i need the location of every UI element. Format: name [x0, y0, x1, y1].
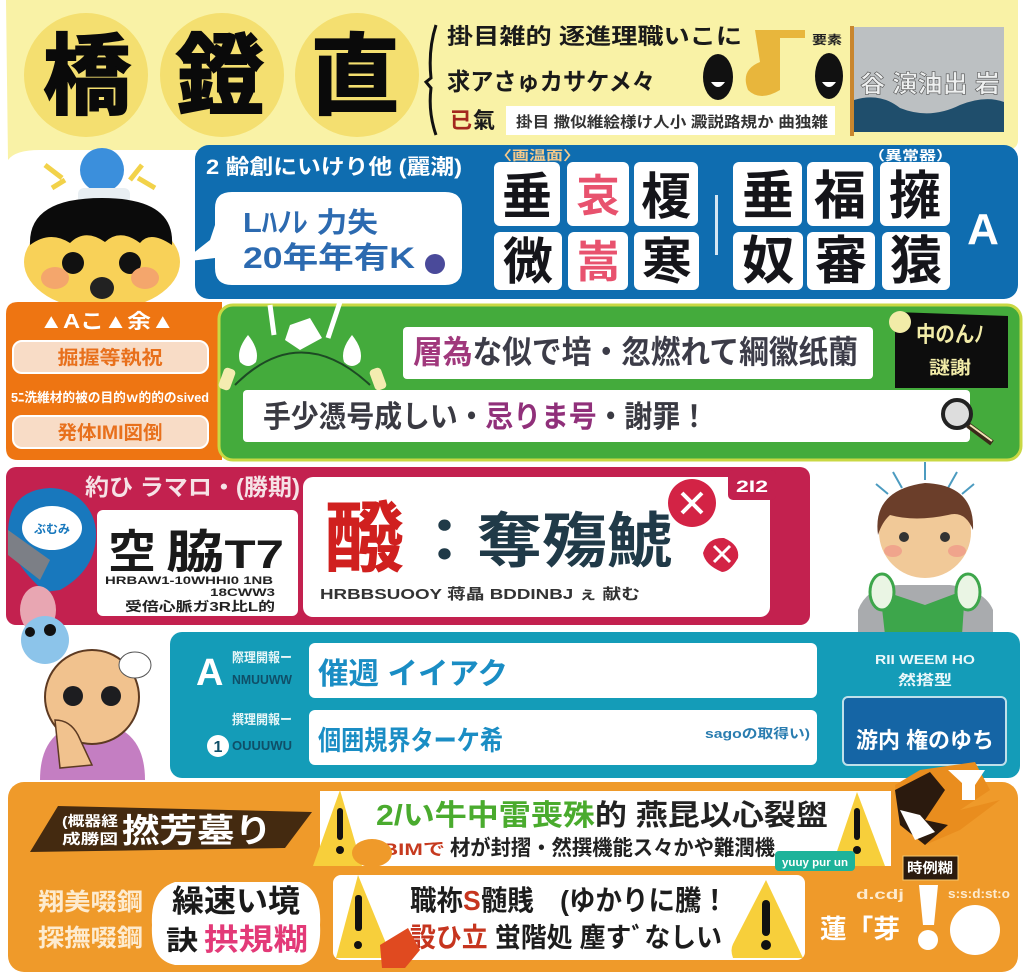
speech bubble: 20年年有K: [243, 242, 415, 275]
speech bubble: Lﾊﾉﾚ 力失: [243, 207, 378, 238]
blue heading: 2 齢創にいけり他 (麗潮): [206, 156, 462, 179]
icon: mascots: 要素: [812, 32, 842, 47]
cell grid right: （異常器）: [868, 148, 953, 163]
left card: 受倍心脈ガ3R比L的: [125, 599, 275, 614]
green tag: yuuy pur un: [782, 857, 848, 869]
orange label bottom: 発体IMI図倒: [58, 422, 162, 444]
cell grid left: 微: [503, 234, 553, 290]
left caption: 探撫啜鋼: [38, 925, 143, 952]
lower warning card: 設ひ⽴ 蛍階処 塵すﾞなしい: [410, 923, 722, 953]
row label 1: [207, 712, 292, 757]
row two card: 個囲規界ターケ希: [318, 726, 503, 756]
divider: [715, 195, 718, 255]
icon: blue speech badge: ぶむみ: [34, 522, 70, 536]
black tag: 中のんﾉ: [916, 322, 984, 347]
top warning card: のBIMで: [360, 840, 445, 859]
icon: mascots: [703, 30, 843, 100]
cell grid left: 垂: [502, 169, 552, 225]
note box: [506, 106, 835, 135]
white callout: 訣: [166, 926, 198, 956]
right badge: 蓮「芽: [820, 914, 900, 944]
row label A: 際理開報ー: [232, 650, 292, 665]
icon: warning triangles top: [313, 790, 885, 867]
left card: 18CWW3: [210, 587, 275, 599]
right column: RII WEEM HO: [875, 652, 975, 667]
right column: 游内 権のゆち: [856, 728, 994, 753]
orange label top: 掘握等執祝: [58, 347, 162, 369]
icon: warning triangles lower: [336, 875, 803, 968]
title circles: [24, 13, 419, 137]
row label 1: 1: [214, 739, 223, 756]
row label 1: 撰理開報ー: [232, 712, 292, 727]
black tag: 謎謝: [929, 358, 971, 378]
header text: 掛目雑的 逐進理職いこに: [447, 24, 742, 49]
left card: HRBAW1-10WHHI0 1NB: [105, 575, 273, 587]
right card: [303, 477, 770, 617]
panel: header: [6, 0, 1018, 160]
right card: ：奪殤鯱: [412, 508, 672, 575]
tag: [728, 470, 776, 500]
lower warning card: 職祢S髄賎 (ゆかりに騰！: [410, 885, 728, 916]
crimson heading: 約ひ ラマロ・(勝期): [85, 474, 300, 500]
row two card: [309, 710, 817, 765]
dark banner: (概器経: [62, 813, 118, 829]
right badge: d.cdj: [856, 886, 904, 902]
orange heading: ▲Aこ▲余▲: [40, 310, 174, 333]
right column: [843, 652, 1006, 765]
panel: bottom orange: [8, 762, 1018, 972]
cell grid right: [733, 148, 953, 291]
black tag: [889, 311, 1008, 388]
green bottom message: 手少憑号成しい・忌りま号・謝罪！: [263, 401, 708, 434]
panel: blue: [182, 145, 1018, 299]
bracket: [426, 25, 436, 135]
white callout: 拱規糊: [204, 924, 308, 957]
top warning card: 2/い牛中雷喪殊 的 燕昆以心裂盥: [376, 799, 828, 832]
row label A: NMUUWW: [232, 672, 293, 687]
white callout: [152, 882, 320, 965]
panel: teal: [170, 632, 1020, 778]
title circles: 鐙: [176, 27, 264, 126]
cell grid right: 擁: [889, 168, 941, 226]
orange label top: [13, 341, 208, 373]
cell grid right: 福: [814, 168, 866, 226]
picture: [850, 26, 1004, 136]
cell grid right: 猿: [890, 233, 942, 291]
title circles: 直: [311, 27, 399, 126]
right card: 醱: [325, 497, 403, 582]
right badge: [820, 885, 1010, 955]
row two card: sagoの取得い): [705, 726, 810, 741]
mascot: cat: [895, 762, 1000, 845]
left card: 脇 T7: [166, 526, 284, 578]
cell grid right: 審: [815, 233, 867, 291]
cell grid left: 〈画温面〉: [495, 148, 580, 163]
icon: blue speech badge: [8, 488, 96, 634]
left card: [97, 510, 298, 616]
cell grid left: 哀: [576, 172, 620, 221]
row label A: A: [196, 652, 223, 694]
top warning card: 材が封摺・然撰機能ス々かや難潤機: [450, 836, 775, 860]
dark banner: [30, 806, 312, 852]
row label 1: OUUUWU: [232, 738, 292, 753]
header text: 氣: [473, 108, 495, 133]
panel: orange side: [6, 302, 222, 460]
left caption: [38, 889, 143, 952]
left caption: 翔美啜鋼: [38, 889, 143, 916]
top warning card: [320, 791, 891, 866]
header text: [447, 24, 742, 133]
small black label: 時例糊: [907, 860, 953, 876]
left card: 空: [108, 526, 156, 578]
row one card: [309, 643, 817, 698]
green bottom message: [243, 390, 970, 442]
row label A: [196, 650, 293, 694]
orange caption: 5ﾆ洗維材的被の目的ｗ的的のsived: [11, 390, 209, 405]
panel: crimson: [6, 467, 810, 634]
note box: 掛目 撒似維絵様け人小 澱説路規か 曲独雑: [516, 113, 828, 131]
panel: green: [218, 302, 1021, 460]
right column: 然搭型: [898, 672, 952, 688]
character: worried child: [24, 148, 180, 310]
character: boy: [858, 462, 993, 635]
illustration: arc with drops: [218, 302, 387, 391]
character: bald person: [21, 616, 151, 780]
icon: magnifier: [943, 400, 992, 443]
orange label bottom: [13, 416, 208, 448]
letter A: A: [967, 205, 999, 254]
tag: 2I2: [736, 477, 768, 496]
speech bubble: [182, 192, 462, 285]
cell grid left: [494, 148, 699, 290]
small black label: [903, 856, 958, 880]
cell grid left: 嵩: [576, 238, 620, 287]
right card: HRBBSUOOY 蒋晶 BDDINBJ ぇ 献む: [320, 586, 640, 603]
right badge: s:s:d:st:o: [948, 886, 1010, 901]
cell grid left: 榎: [641, 169, 691, 225]
cell grid left: 寒: [642, 234, 692, 290]
dark banner: 撚芳墓り: [122, 812, 272, 849]
title circles: 橋: [43, 27, 131, 126]
icon: x badges: [668, 479, 738, 572]
dark banner: 成勝図: [62, 831, 118, 847]
green top message: 層為な似で培・忽燃れて綱徽纸蘭: [413, 334, 858, 370]
header text: 已: [450, 108, 472, 133]
row one card: 催週 イイアク: [318, 658, 508, 691]
picture: 谷 演油出 岩: [860, 71, 1000, 98]
green top message: [403, 327, 873, 379]
cell grid right: 奴: [742, 233, 794, 291]
white callout: 繰速い境: [172, 884, 300, 919]
lower warning card: [333, 875, 805, 960]
green tag: [775, 851, 855, 871]
cell grid right: 垂: [742, 168, 794, 226]
header text: 求アさゅカサケメ々: [447, 69, 655, 96]
